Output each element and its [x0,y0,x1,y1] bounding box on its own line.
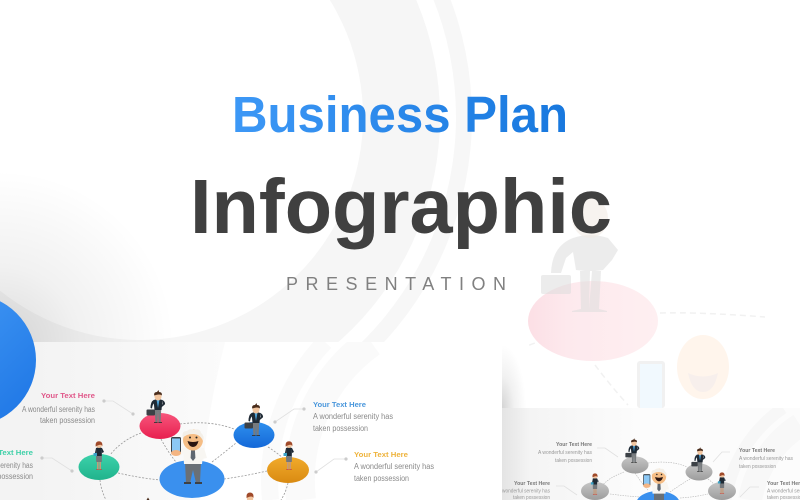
shadow of slide edge [502,345,526,408]
node: orange [267,441,309,483]
label: pink [22,391,95,425]
grey node right [708,472,736,500]
grey connector lines [602,462,717,498]
small label: right [767,481,800,500]
small label: top left: taken possession [555,458,592,464]
label: pink: taken possession [40,416,95,425]
small label: top left: Your Text Here [556,442,592,448]
subtitle: Presentation: PRESENTATION [286,274,506,294]
label: orange [354,450,434,483]
node: pink [140,390,180,439]
label: blue: taken possession [313,424,368,433]
label: orange: A wonderful serenity has [354,462,434,471]
node: green [78,441,120,480]
grey node right top [686,447,712,480]
faded connectors [502,313,765,405]
faded pink platform [528,281,658,361]
title line: Infographic: Infographic [190,164,612,250]
small label: top right: taken possession [739,464,776,470]
label: pink: Your Text Here [41,391,95,400]
node: central manager [160,429,224,498]
partial figures at the bottom [146,492,254,500]
label: orange: taken possession [354,474,409,483]
faded manager [637,335,729,408]
small label: left: Your Text Here [514,481,550,487]
small label: top left: A wonderful serenity has [538,450,592,456]
small label: top right: A wonderful serenity has [739,456,793,462]
label: blue: A wonderful serenity has [313,412,393,421]
small label: top right: Your Text Here [739,448,775,454]
small label: left [502,481,550,500]
small label: top right [739,448,793,470]
label: blue [313,400,393,433]
node: small blue [234,403,274,448]
slide preview: grey diagram [502,408,759,500]
title line: Business Plan: Business Plan [232,86,568,143]
small label: left: wonderful serenity has [502,488,550,494]
label: blue: Your Text Here [313,400,366,409]
slide preview: colour diagram [0,342,348,500]
label: teal [0,448,33,481]
faded businessman [541,198,618,312]
central node with manager [637,469,679,500]
label: pink: A wonderful serenity has [22,405,95,414]
faded background illustration [502,198,765,408]
grey node left top [622,438,648,474]
leader lines [40,399,348,474]
connector lines [100,423,288,500]
label: orange: Your Text Here [354,450,408,459]
blue corner circle [0,294,36,426]
grey node left [581,473,609,500]
grey leader lines [556,448,759,497]
small label: top left [538,442,592,464]
